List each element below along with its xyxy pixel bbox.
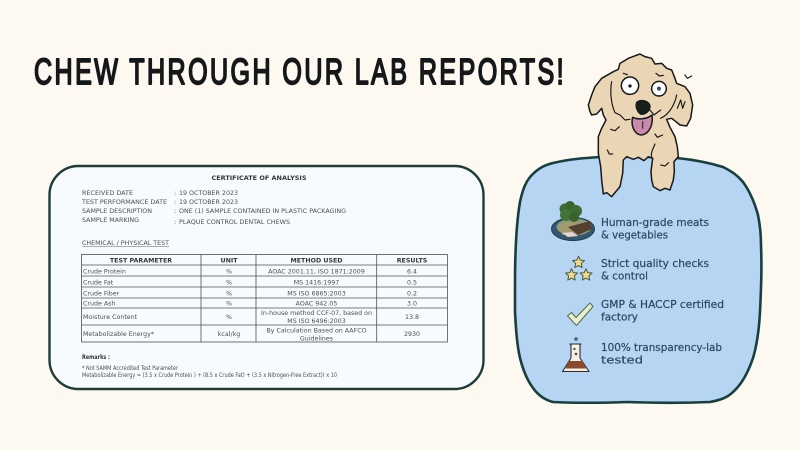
test results table: RESULTS [397,258,428,264]
sample details: : [174,199,176,206]
sample details: SAMPLE MARKING [82,217,139,224]
tongue [632,115,652,135]
test results table: % [226,314,232,321]
feature text: certification: factory [601,312,638,324]
nose [636,101,650,114]
test results table: % [226,280,232,286]
test results table: kcal/kg [218,331,240,338]
sample details: SAMPLE DESCRIPTION [82,208,152,215]
sample details: 19 OCTOBER 2023 [179,190,238,197]
test results table: % [226,300,232,308]
blue panel [515,157,761,403]
test results table: In-house method CCF-07, based on [261,310,372,317]
feature text: meats: Human-grade meats [601,217,709,229]
test results table: 13.8 [405,314,419,321]
certificate heading: CERTIFICATE OF ANALYSIS [212,175,307,182]
panel: certificate of analysis [50,166,484,389]
feature text: quality: Strict quality checks [601,258,709,270]
feature text: certification: GMP & HACCP certified [601,299,724,311]
test results table [82,254,448,342]
test results table: Crude Protein [83,268,126,276]
section heading: CHEMICAL / PHYSICAL TEST [82,240,169,247]
panel: product features [515,157,761,403]
icon: plate of meat and vegetables [552,201,594,240]
test results table: METHOD USED [290,258,343,264]
test results table: % [226,290,232,298]
test results table: UNIT [220,258,238,264]
test results table: MS ISO 6865:2003 [287,290,346,298]
test results table: 2930 [404,331,420,338]
ear and face fur lines [607,73,692,166]
sample details: : [174,219,176,226]
feature text: meats [601,217,709,242]
test results table: Metabolizable Energy* [83,331,154,338]
test results table: 6.4 [407,268,417,276]
sample details [81,190,346,226]
icon: check mark [568,303,593,326]
title: CHEW THROUGH OUR LAB REPORTS! [34,51,566,92]
test results table: 3.0 [407,300,417,308]
remarks: Remarks : [82,354,110,361]
dog body [588,54,693,197]
test results table: 0.2 [407,290,417,298]
icon: three stars [566,256,592,280]
sample details: ONE (1) SAMPLE CONTAINED IN PLASTIC PACKAGING [179,208,346,215]
test results table: 0.5 [407,280,417,286]
test results table: MS 1416:1997 [294,280,339,286]
test results table: Crude Ash [83,300,115,308]
feature text: lab testing [601,342,722,366]
sample details: TEST PERFORMANCE DATE [81,199,167,206]
remarks: Metabolizable Energy = (3.5 x Crude Protein ) + (8.5 x Crude Fat) + (3.5 x Nitrogen-Free Extract)) x 10 [82,372,337,379]
remarks [82,354,337,379]
certificate card [50,166,484,389]
feature text: quality [601,258,709,282]
tongue crease [641,122,644,128]
sample details: RECEIVED DATE [82,190,133,197]
feature text: meats: & vegetables [601,230,668,242]
test results table: By Calculation Based on AAFCO [266,328,367,334]
icon: lab flask [562,337,589,372]
test results table: % [226,268,232,276]
test results table: Crude Fiber [83,290,120,298]
feature text: lab testing: tested [601,354,643,366]
test results table: AOAC 942.05 [296,300,337,308]
test results table: Crude Fat [83,280,114,286]
test results table: Guidelines [300,336,333,342]
remarks: * Not SAMM Accredited Test Parameter [82,365,178,372]
sample details: : [174,190,176,197]
sample details: : [174,208,176,215]
test results table: TEST PARAMETER [110,258,172,264]
feature text: certification [601,299,724,324]
feature text: quality: & control [601,270,648,282]
right eye [652,81,666,96]
feature text: lab testing: 100% transparency-lab [601,342,722,354]
test results table: MS ISO 6496:2003 [287,318,346,325]
sample details: 19 OCTOBER 2023 [179,199,238,206]
sample details: PLAQUE CONTROL DENTAL CHEWS [179,219,290,226]
test results table: AOAC 2001.11, ISO 1871:2009 [268,268,365,276]
illustration: dog [588,54,693,197]
left eye [621,77,639,94]
test results table: Moisture Content [83,314,138,321]
